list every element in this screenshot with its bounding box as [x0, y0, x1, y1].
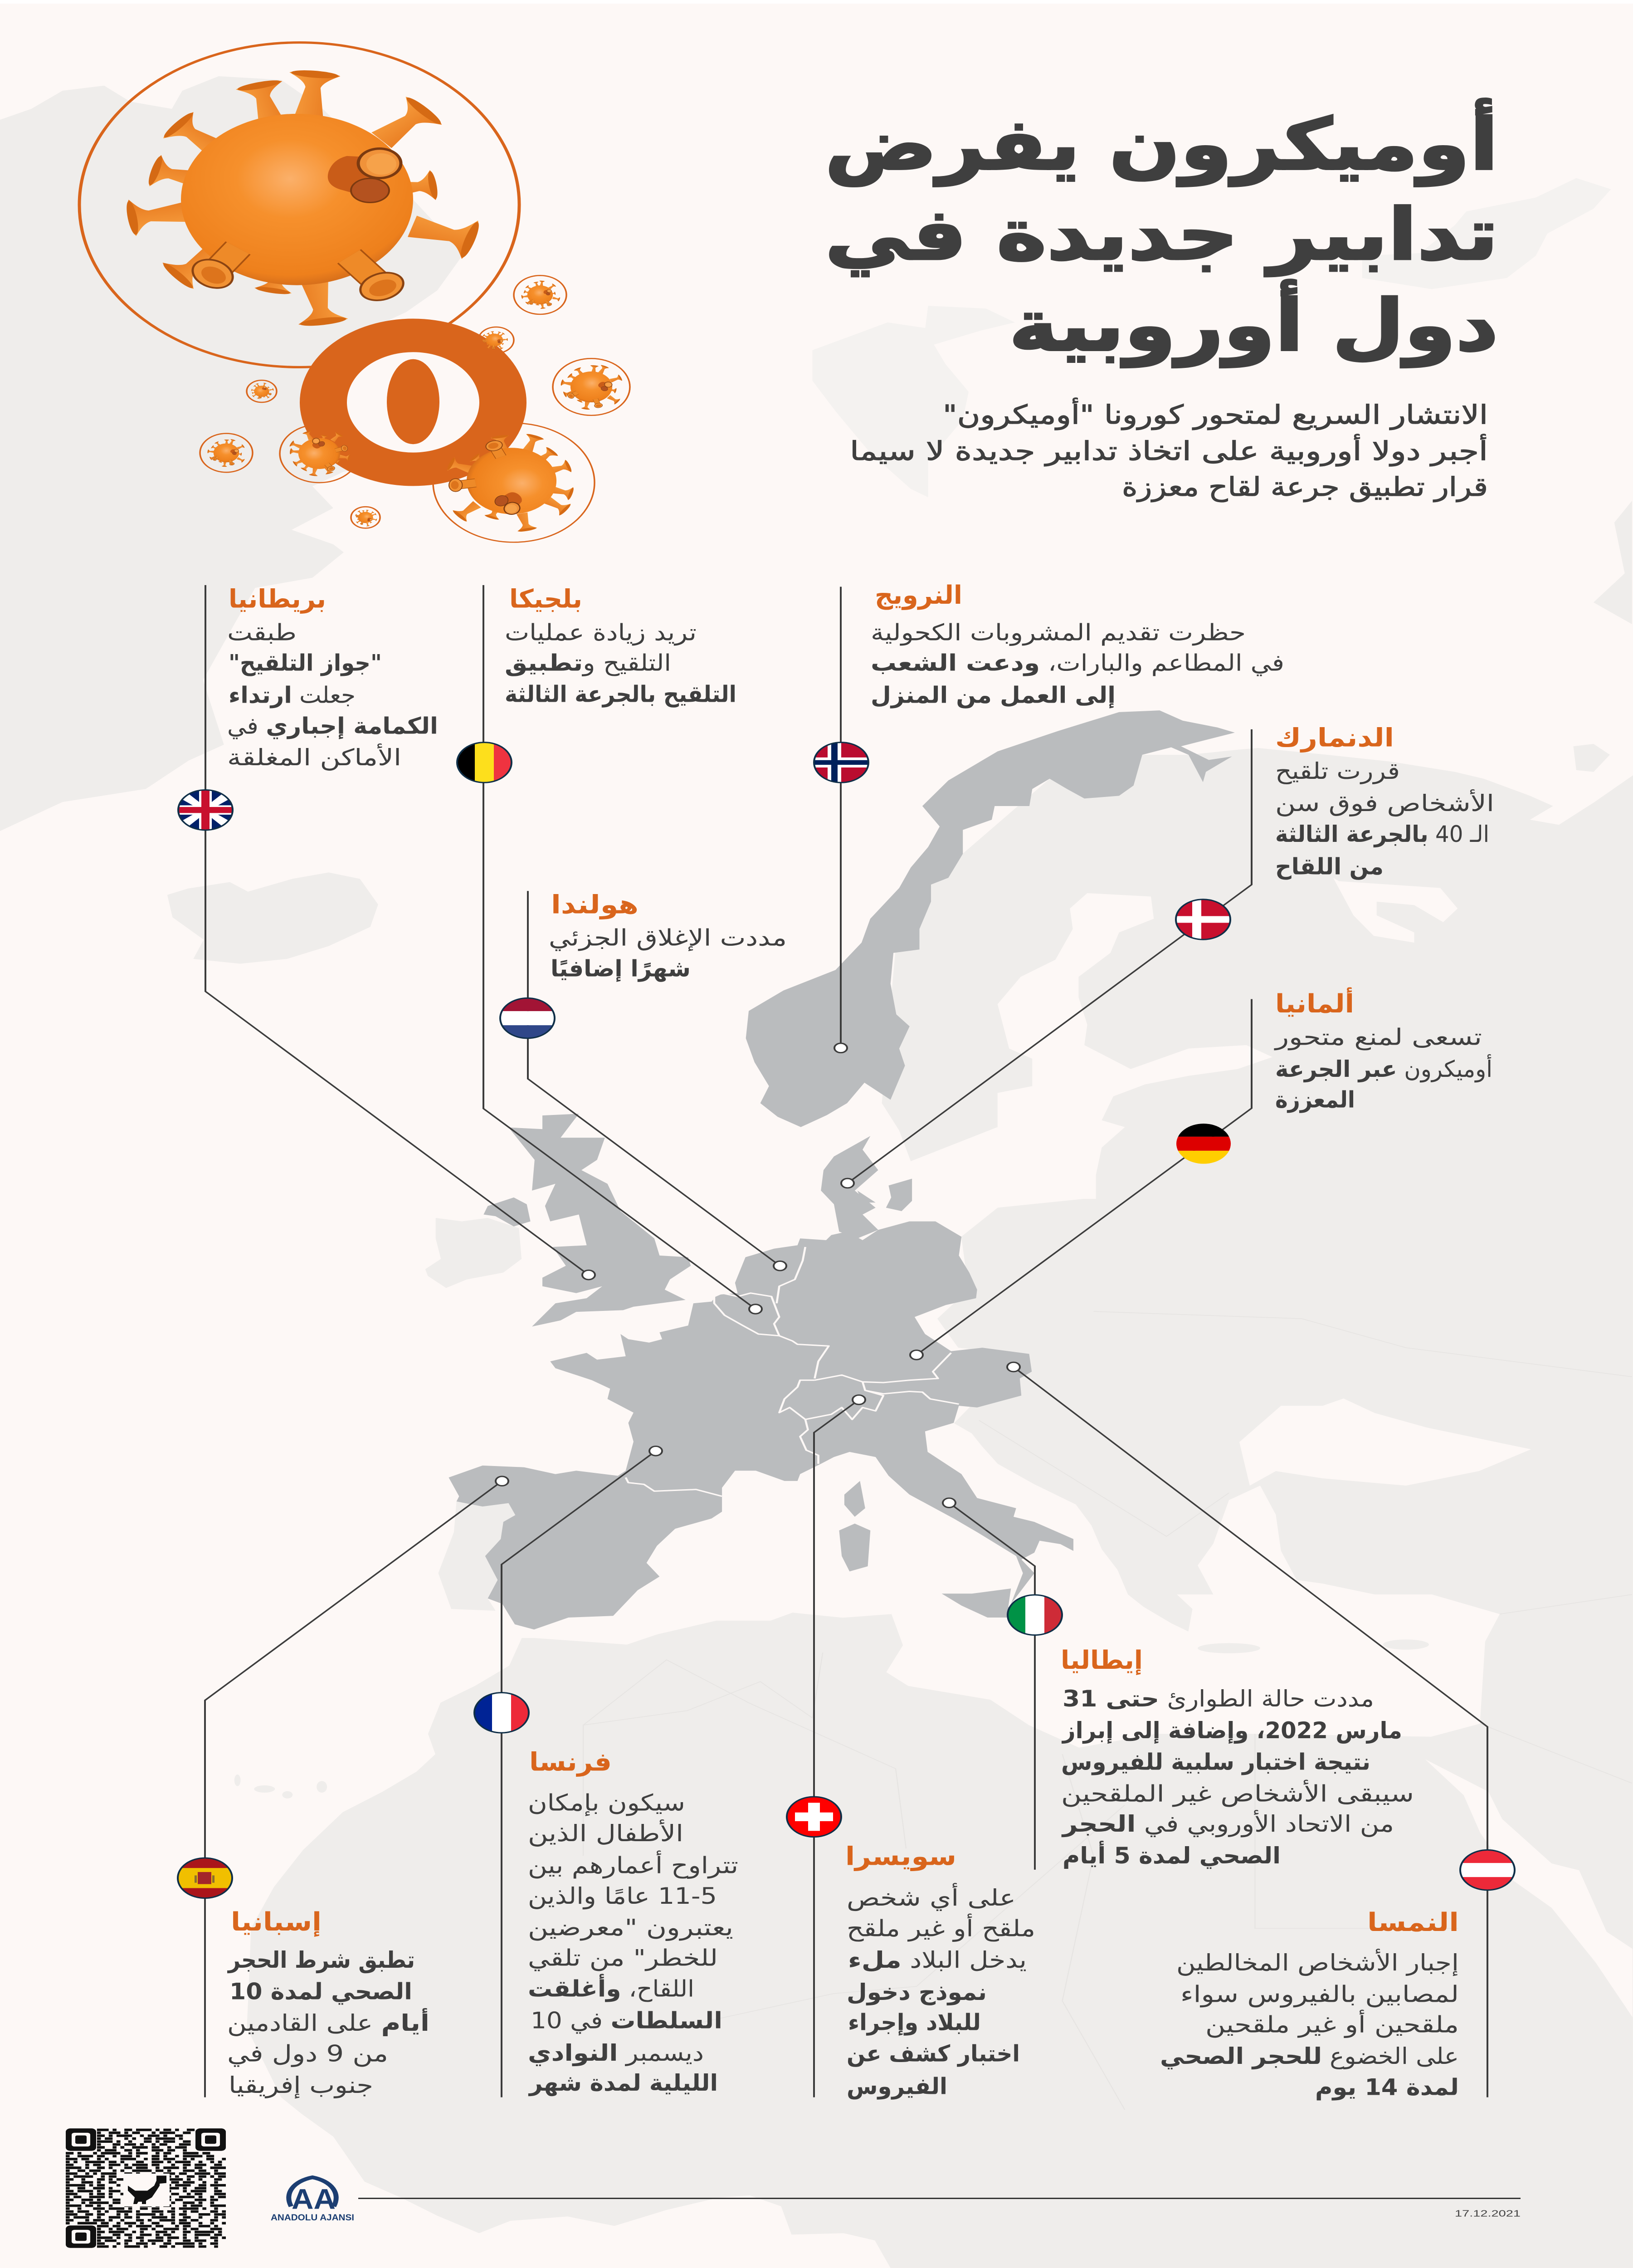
text: Germany: تسعى لمنع متحور: [1274, 1024, 1482, 1051]
logo: Anadolu Ajansi: AA: [292, 2183, 336, 2215]
text: France: الأطفال الذين: [528, 1819, 683, 1847]
text: Switzerland: الفيروس: [847, 2073, 947, 2100]
text: France: اللقاح، وأغلقت: [528, 1974, 694, 2002]
heading: Belgium: بلجيكا: [509, 584, 582, 614]
text: United Kingdom: "جواز التلقيح": [229, 650, 382, 676]
text: Italy: سيبقى الأشخاص غير الملقحين: [1061, 1780, 1414, 1807]
text: Austria: [1160, 1949, 1459, 2101]
text: France: ديسمبر النوادي: [528, 2040, 704, 2067]
icon: main virus: [124, 69, 483, 328]
location markers: [496, 1043, 1020, 1507]
text: Germany: [1274, 1024, 1492, 1113]
QR finder squares: [66, 2128, 226, 2248]
text: Denmark: [1275, 758, 1494, 880]
map: highlighted countries: [448, 710, 1235, 1629]
text: Italy: الصحي لمدة 5 أيام: [1063, 1841, 1281, 1869]
text: Italy: مددت حالة الطوارئ حتى 31: [1063, 1686, 1374, 1712]
panel: Belgium: [505, 584, 736, 708]
emblem: letter O: [300, 318, 526, 486]
text: Austria: إجبار الأشخاص المخالطين: [1176, 1949, 1459, 1976]
text: Germany: المعززة: [1275, 1087, 1355, 1113]
heading: Italy: إيطاليا: [1061, 1645, 1143, 1675]
text: United Kingdom: [227, 620, 438, 771]
date: 17.12.2021: [1455, 2209, 1521, 2219]
panel: Netherlands: [549, 890, 787, 982]
text: France: للخطر" من تلقي: [528, 1945, 718, 1971]
heading: Switzerland: سويسرا: [845, 1842, 956, 1872]
flag: Germany: [1175, 1123, 1232, 1164]
logo: Anadolu Ajansi: [271, 2177, 354, 2222]
logo: Anadolu Ajansi: ANADOLU AJANSI: [271, 2213, 354, 2222]
text: France: سيكون بإمكان: [528, 1790, 685, 1816]
flag: Norway: [813, 742, 869, 783]
text: France: الليلية لمدة شهر: [528, 2070, 718, 2097]
subtitle: [850, 397, 1488, 502]
flag: France: [473, 1692, 530, 1734]
text: Switzerland: للبلاد وإجراء: [848, 2009, 981, 2036]
footer rule: [358, 2198, 1521, 2199]
text: Austria: لمدة 14 يوم: [1315, 2074, 1459, 2101]
text: Belgium: التلقيح بالجرعة الثالثة: [505, 681, 736, 708]
text: Spain: الصحي لمدة 10: [229, 1979, 412, 2005]
text: Italy: من الاتحاد الأوروبي في الحجر: [1061, 1810, 1394, 1837]
text: Spain: من 9 دول في: [227, 2041, 388, 2067]
icon: QR dinosaur: [123, 2174, 170, 2206]
background map: inland seas: [1239, 878, 1633, 2017]
flag: Belgium: [456, 742, 512, 783]
text: Denmark: الـ 40 بالجرعة الثالثة: [1275, 821, 1489, 847]
text: Norway: إلى العمل من المنزل: [871, 682, 1116, 709]
text: United Kingdom: الكمامة إجباري في: [227, 713, 438, 739]
panel: Germany: [1274, 987, 1492, 1113]
panel: Austria: [1160, 1907, 1459, 2101]
text: Denmark: من اللقاح: [1275, 854, 1384, 880]
text: Belgium: التلقيح وتطبيق: [505, 650, 671, 676]
flag: Italy: [1007, 1594, 1063, 1636]
text: Belgium: تريد زيادة عمليات: [505, 620, 697, 646]
text: Netherlands: مددت الإغلاق الجزئي: [549, 925, 787, 951]
heading: Spain: إسبانيا: [231, 1907, 322, 1937]
text: France: 11-5 عامًا والذين: [528, 1883, 717, 1910]
text: Switzerland: [847, 1882, 1035, 2100]
text: France: [528, 1790, 738, 2097]
text: Spain: [227, 1947, 429, 2099]
subtitle: أجبر دولا أوروبية على اتخاذ تدابير جديدة لا سيما: [850, 434, 1488, 466]
subtitle: الانتشار السريع لمتحور كورونا "أوميكرون": [943, 397, 1488, 430]
heading: Austria: النمسا: [1367, 1907, 1459, 1937]
panel: Switzerland: [845, 1842, 1035, 2100]
text: Netherlands: [549, 925, 787, 982]
text: Norway: [871, 620, 1284, 709]
panel: France: [528, 1747, 738, 2097]
text: Denmark: الأشخاص فوق سن: [1275, 789, 1494, 817]
text: Norway: حظرت تقديم المشروبات الكحولية: [871, 620, 1246, 646]
text: Spain: تطبق شرط الحجر: [227, 1947, 415, 1974]
leader lines: [205, 585, 1487, 2097]
title: دول أوروبية: [1009, 279, 1498, 367]
flag: Denmark: [1175, 899, 1231, 940]
text: Netherlands: شهرًا إضافيًا: [551, 956, 691, 982]
text: Austria: على الخضوع للحجر الصحي: [1160, 2043, 1459, 2069]
text: Italy: [1061, 1686, 1414, 1869]
text: Switzerland: اختبار كشف عن: [847, 2041, 1020, 2067]
text: Switzerland: يدخل البلاد ملء: [848, 1947, 1027, 1974]
text: United Kingdom: جعلت ارتداء: [229, 682, 356, 709]
heading: Denmark: الدنمارك: [1275, 723, 1394, 753]
text: Switzerland: على أي شخص: [847, 1882, 1016, 1911]
map: western Europe: [448, 1114, 1073, 1629]
panel: Spain: [227, 1907, 429, 2099]
QR code: [66, 2128, 226, 2248]
heading: Netherlands: هولندا: [551, 890, 639, 920]
text: Austria: لمصابين بالفيروس سواء: [1180, 1981, 1459, 2008]
text: Switzerland: ملقح أو غير ملقح: [847, 1913, 1035, 1942]
panel: United Kingdom: [227, 584, 438, 771]
heading: Norway: النرويج: [875, 580, 962, 610]
title: تدابير جديدة في: [825, 193, 1498, 277]
hero illustration: large virus ring: [79, 43, 634, 552]
map: Norway: [746, 710, 1235, 1127]
panel: Italy: [1061, 1645, 1414, 1869]
text: Germany: أوميكرون عبر الجرعة: [1275, 1054, 1492, 1082]
text: Italy: نتيجة اختبار سلبية للفيروس: [1061, 1749, 1370, 1775]
flag: United Kingdom: [177, 789, 234, 831]
text: France: يعتبرون "معرضين: [528, 1915, 733, 1941]
text: United Kingdom: الأماكن المغلقة: [227, 743, 401, 771]
text: Norway: في المطاعم والبارات، ودعت الشعب: [871, 650, 1284, 676]
map: country borders: [626, 1247, 959, 1496]
text: Spain: أيام على القادمين: [227, 2008, 429, 2036]
background map: faint country borders: [583, 1311, 1632, 2110]
text: United Kingdom: طبقت: [227, 620, 297, 646]
text: Denmark: قررت تلقيح: [1275, 758, 1400, 785]
text: Switzerland: نموذج دخول: [847, 1980, 987, 2006]
icon: small viruses: [203, 280, 634, 552]
flag: Spain: [177, 1857, 233, 1899]
flag: Switzerland: [786, 1796, 842, 1838]
text: France: تتراوح أعمارهم بين: [528, 1850, 738, 1879]
text: Austria: ملقحين أو غير ملقحين: [1205, 2009, 1459, 2038]
heading: France: فرنسا: [529, 1747, 612, 1777]
text: France: السلطات في 10: [531, 2008, 722, 2034]
text: Spain: جنوب إفريقيا: [229, 2072, 373, 2099]
panel: Norway: [871, 580, 1284, 709]
heading: United Kingdom: بريطانيا: [229, 584, 326, 614]
title: [825, 98, 1498, 367]
small virus rings behind the emblem: [200, 275, 630, 542]
flag: Austria: [1459, 1849, 1516, 1891]
subtitle: قرار تطبيق جرعة لقاح معززة: [1122, 472, 1488, 502]
text: Italy: مارس 2022، وإضافة إلى إبراز: [1062, 1718, 1402, 1744]
heading: Germany: ألمانيا: [1275, 987, 1354, 1019]
panel: Denmark: [1275, 723, 1494, 880]
text: Belgium: [505, 620, 736, 708]
title: أوميكرون يفرض: [825, 98, 1498, 186]
flag: Netherlands: [499, 997, 556, 1039]
